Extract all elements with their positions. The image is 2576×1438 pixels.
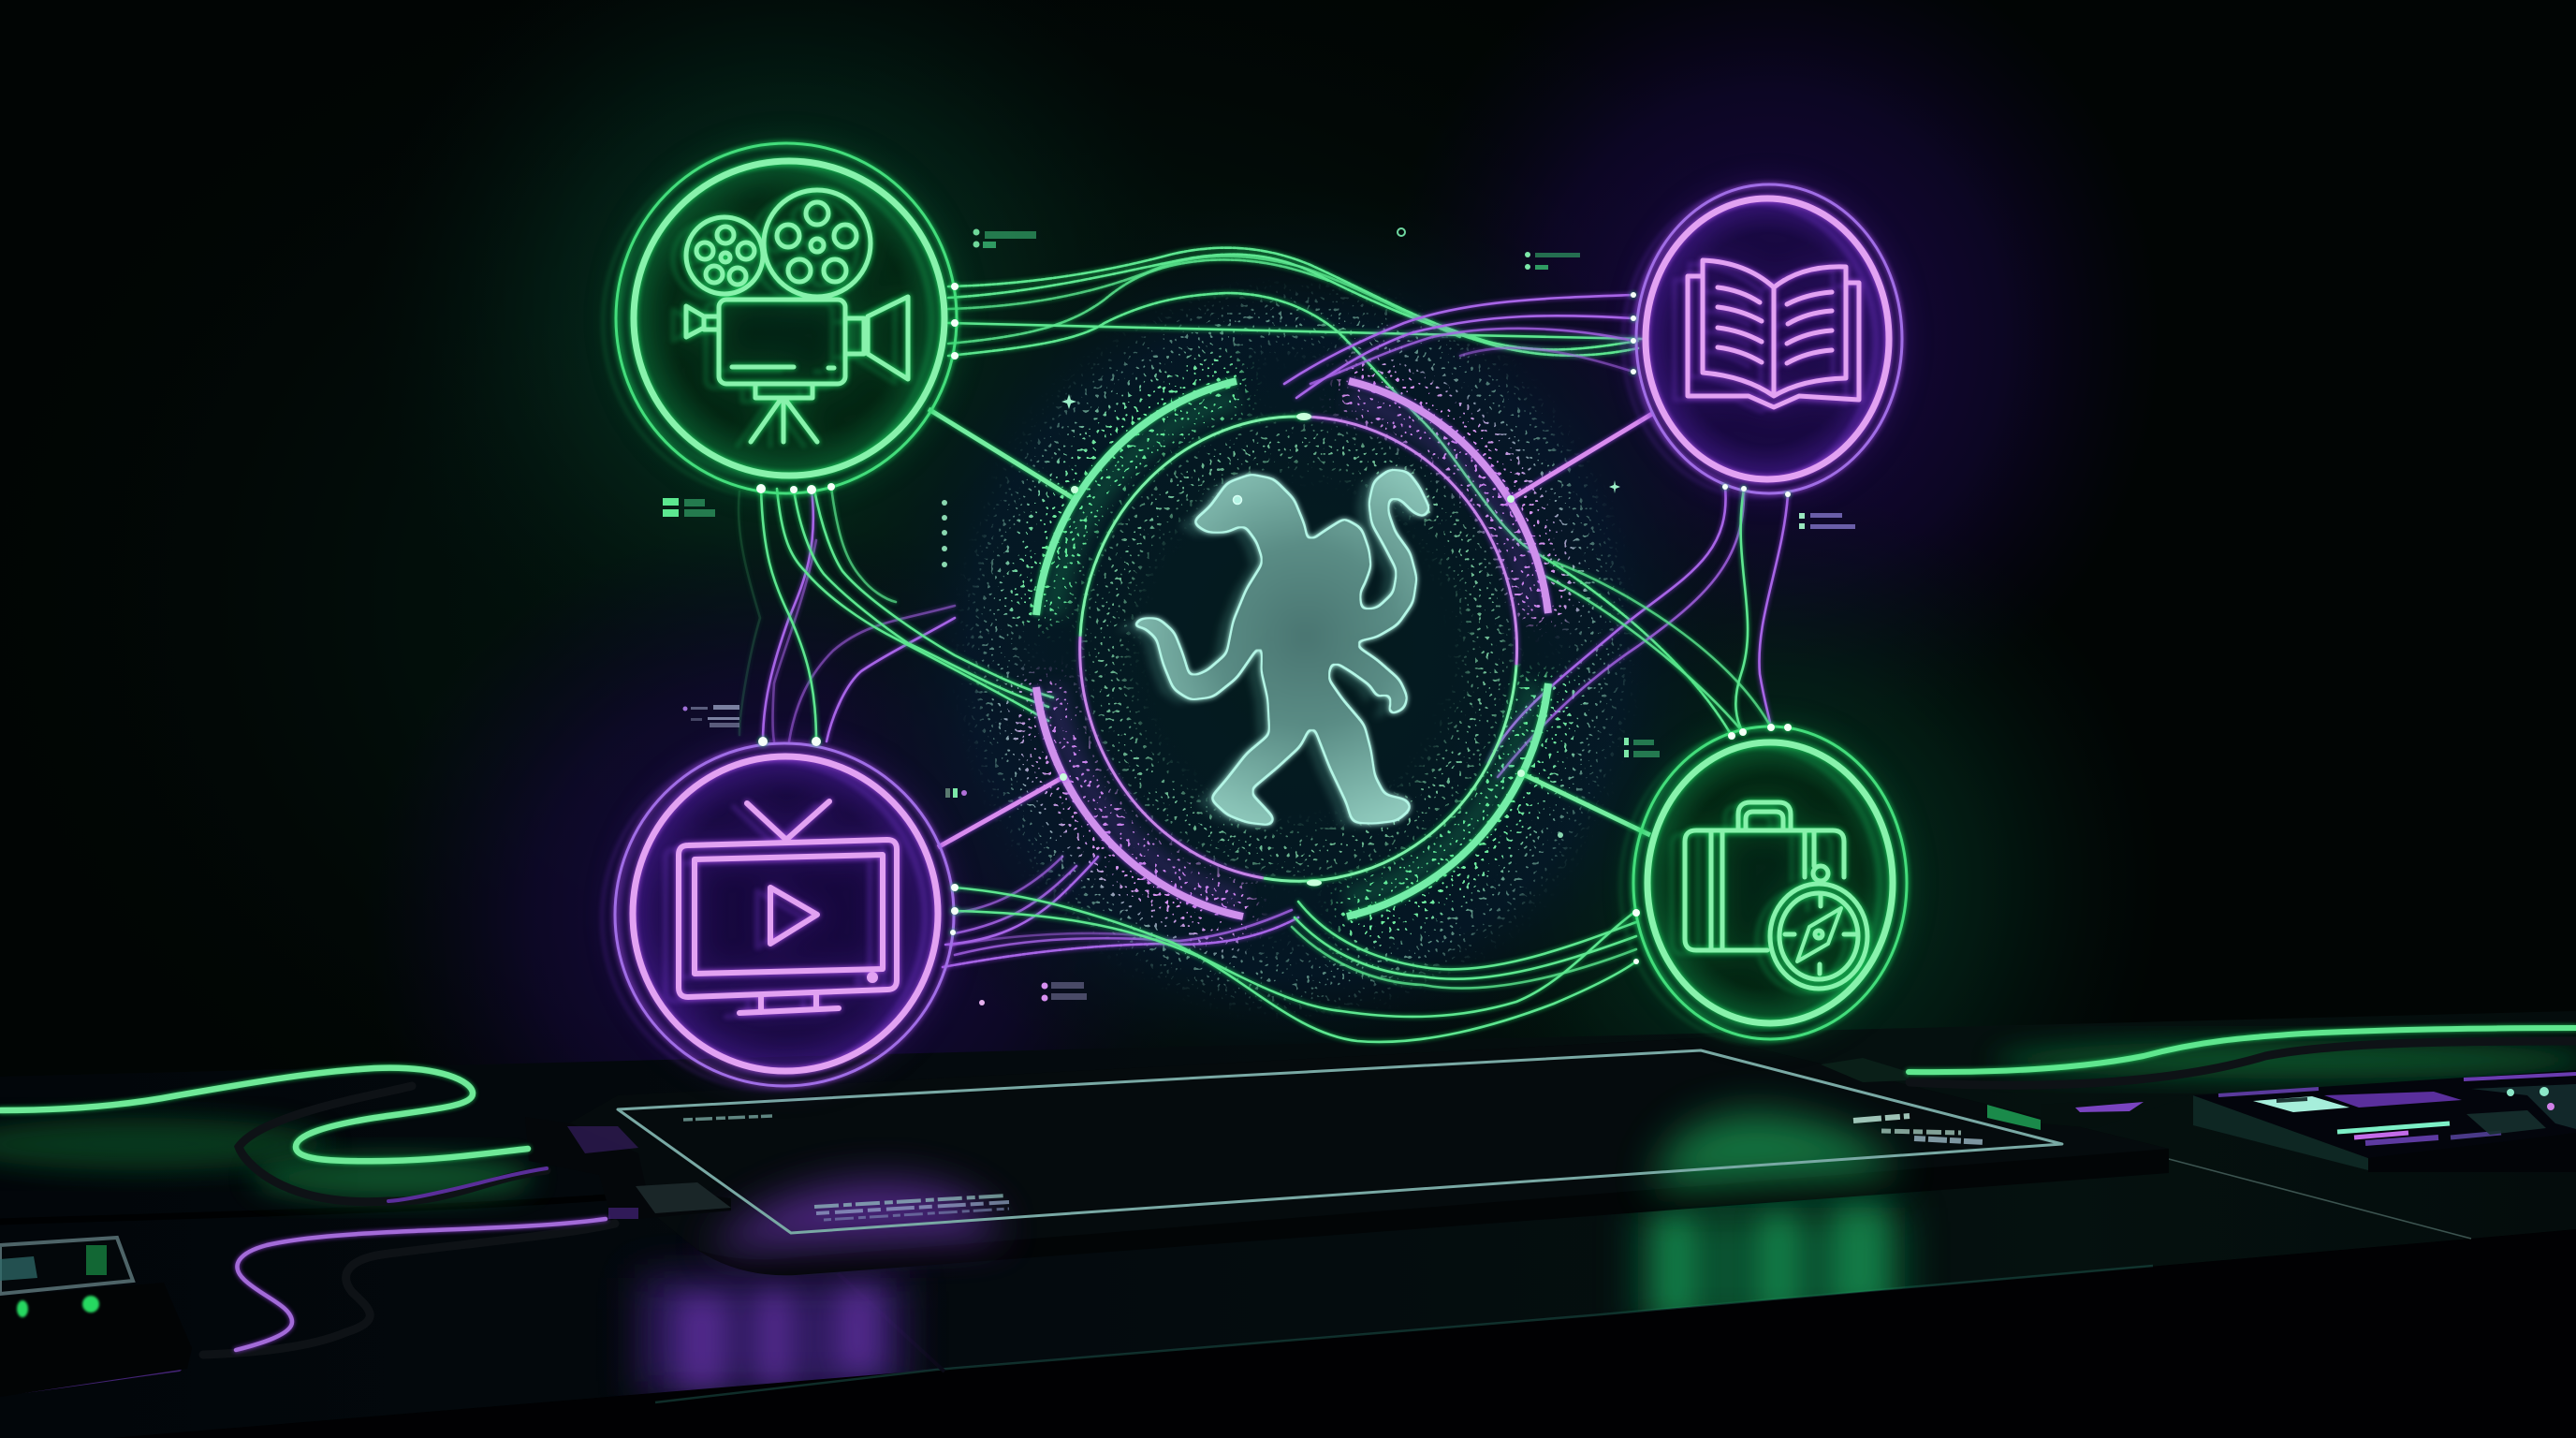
outer arc: lower right green [1347, 683, 1548, 917]
cable: left green [0, 1068, 528, 1161]
spoke: film to hub [929, 409, 1075, 499]
creature ghost shadow [1117, 474, 1416, 829]
HUD dots: vertical marker [942, 500, 947, 567]
fiber bundle: book to case [1488, 487, 1788, 777]
table reflections [0, 1041, 2576, 1395]
creature eye [1234, 496, 1241, 504]
arc shadow bands [1053, 398, 1531, 900]
panel: tv node [615, 743, 954, 1086]
right control console [2193, 1070, 2576, 1172]
spoke: case to hub [1521, 773, 1650, 835]
outer arc: lower left purple [1036, 687, 1243, 917]
left connector hub [525, 1117, 731, 1219]
LED indicators [17, 1296, 99, 1317]
outer arc: upper left green [1036, 381, 1237, 615]
mythical monkey-snake creature [1117, 470, 1429, 829]
particle field around hub [997, 321, 1596, 976]
tablet glass outline [618, 1050, 2062, 1233]
hub junction sparks [1060, 413, 1525, 886]
tablet readouts [683, 1116, 1984, 1220]
panel: book node [1636, 184, 1902, 493]
table surface [0, 1011, 2576, 1438]
ambient glow: scene lighting [0, 0, 2163, 1311]
HUD labels: travel node [1558, 738, 1660, 838]
fiber bundle: book to hub [1284, 295, 1633, 398]
panel: film node [616, 143, 957, 493]
dark cables [203, 1041, 2576, 1355]
inner ring [1080, 417, 1517, 881]
cable: dim purple [0, 1168, 547, 1393]
left control device [0, 1238, 192, 1397]
panel: travel node [1633, 726, 1907, 1039]
HUD labels: tv node [945, 788, 1087, 1005]
icon: film camera [686, 190, 908, 442]
spoke: book to hub [1511, 414, 1652, 499]
fiber terminal sparks [756, 283, 1792, 964]
tv ring and icon [615, 743, 954, 1086]
central hub rings [1036, 381, 1548, 917]
tablet device [552, 1037, 2169, 1275]
fiber bundle: film to tv [739, 487, 1053, 741]
spoke: tv to hub [938, 777, 1063, 847]
console screens [2218, 1074, 2576, 1143]
icon: compass [1770, 866, 1867, 989]
tablet glass reflections [707, 1112, 1900, 1250]
HUD labels: left mid [683, 705, 739, 727]
film ring and icon [616, 143, 957, 493]
icon: open book [1688, 260, 1859, 407]
table front dark edge [112, 1229, 2576, 1438]
sparkle stars [1061, 394, 1620, 493]
HUD labels: film node [663, 228, 1405, 517]
cable: right green [1909, 1028, 2576, 1072]
outer arc: upper right purple [1349, 381, 1548, 613]
fiber bundle: tv to case [943, 857, 1636, 1042]
HUD labels: book node [1525, 252, 1855, 529]
right connector hub [1821, 1058, 2190, 1130]
book ring and icon [1636, 184, 1902, 493]
icon: suitcase [1685, 802, 1844, 950]
travel ring and icon [1633, 726, 1907, 1039]
creature body [1130, 470, 1429, 825]
icon: television with play button [679, 801, 897, 1013]
cable: left purple [236, 1219, 606, 1350]
fiber bundle: film to book [948, 248, 1732, 736]
